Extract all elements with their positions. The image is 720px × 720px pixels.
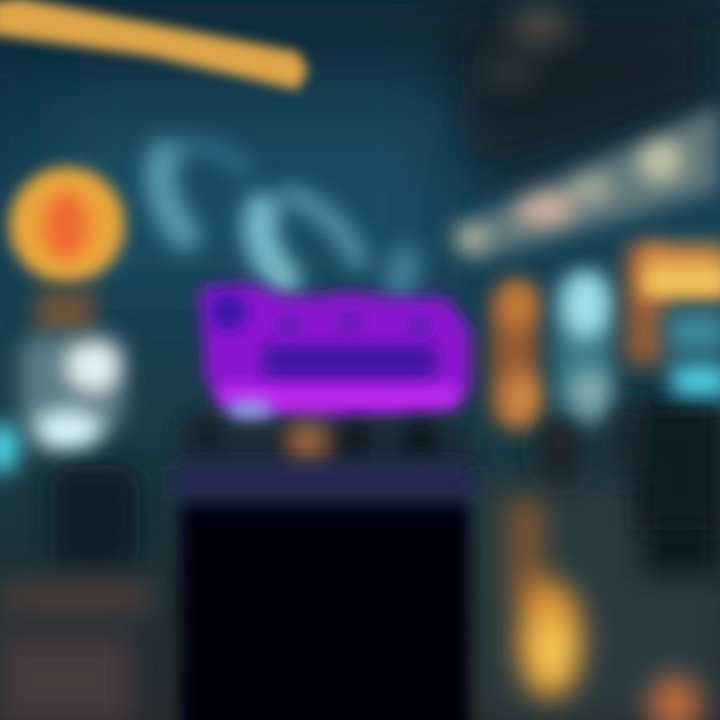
dark ceiling <box>0 0 720 290</box>
orange neon circle <box>9 167 125 283</box>
left dark figure <box>0 465 150 720</box>
purple neon sign <box>200 283 472 424</box>
sign post under circle <box>36 290 94 334</box>
dark figures right <box>536 400 720 530</box>
grey ceiling band <box>454 105 720 262</box>
right shop lights <box>492 245 720 428</box>
floor reflections <box>508 500 701 720</box>
light blue swooshes <box>160 146 405 285</box>
ceiling lights <box>486 5 570 86</box>
figures below sign <box>180 412 470 470</box>
left white lights <box>0 335 125 474</box>
dark counter <box>175 466 475 720</box>
yellow neon bar <box>0 0 308 90</box>
right side floor <box>480 400 720 720</box>
